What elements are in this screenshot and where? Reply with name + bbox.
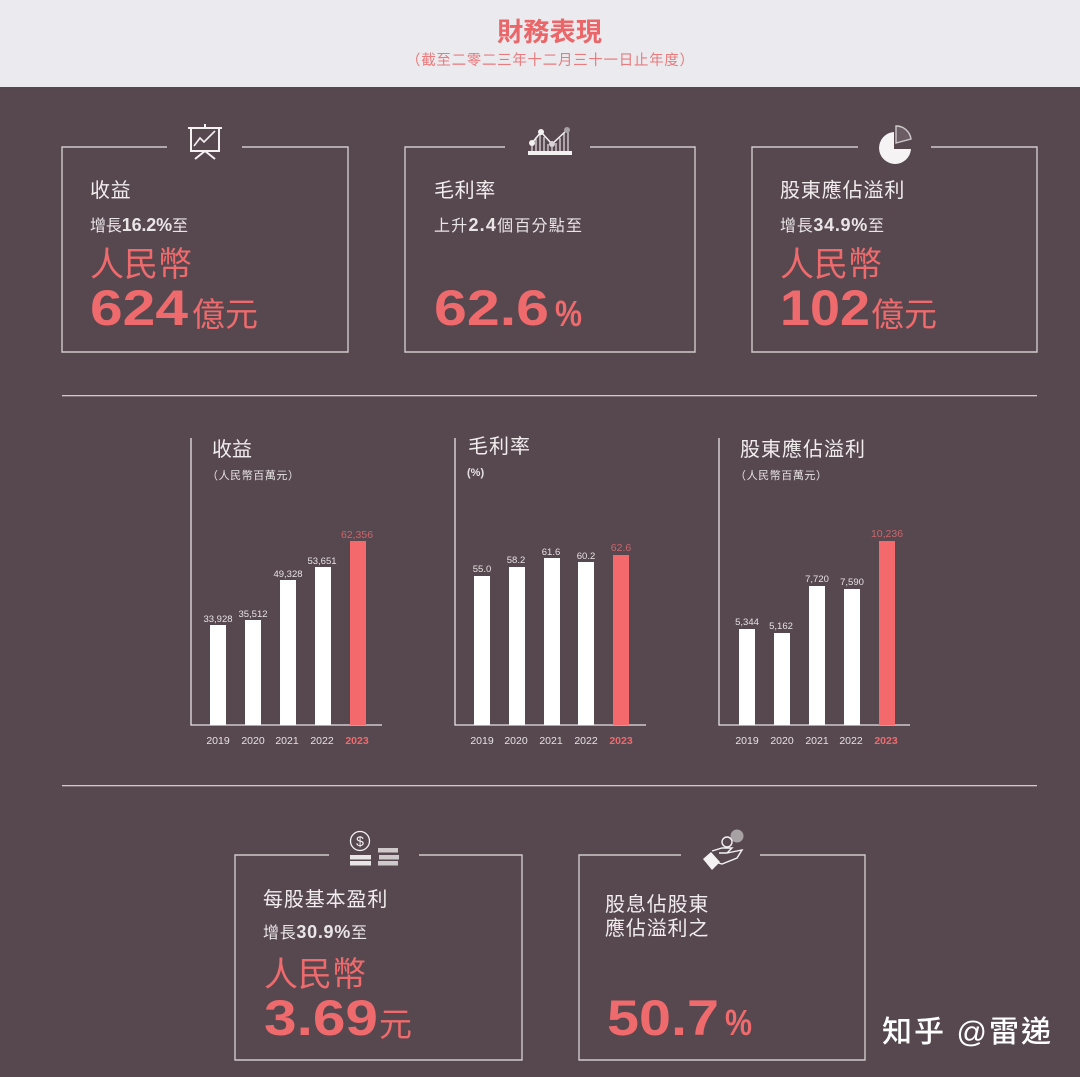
year labels: 2021 bbox=[539, 735, 563, 747]
value: 62.6 bbox=[434, 280, 549, 336]
year labels: 2023 bbox=[874, 735, 898, 747]
value labels: 5,162 bbox=[769, 621, 793, 632]
value labels: 61.6 bbox=[542, 547, 560, 558]
chart title: 收益 bbox=[212, 438, 252, 461]
bar chart: revenue bbox=[191, 438, 382, 747]
year labels: 2022 bbox=[839, 735, 863, 747]
title: 財務表現 bbox=[497, 17, 602, 47]
chart title: 毛利率 bbox=[468, 435, 530, 458]
bars bbox=[210, 541, 366, 725]
unit: % bbox=[555, 293, 582, 334]
panel: revenue bbox=[62, 124, 348, 352]
icon: dollar coin and stacks bbox=[350, 832, 399, 866]
value labels: 58.2 bbox=[507, 555, 525, 566]
year labels: 2022 bbox=[310, 735, 334, 747]
heading: 每股基本盈利 bbox=[263, 888, 388, 911]
value labels: 7,590 bbox=[840, 577, 864, 588]
year labels: 2021 bbox=[275, 735, 299, 747]
panel: profit attributable to shareholders bbox=[752, 126, 1037, 352]
icon: dollar coin and stacks: $ bbox=[356, 833, 364, 849]
currency label: 人民幣 bbox=[90, 246, 192, 284]
value: 3.69 bbox=[264, 990, 378, 1046]
year labels bbox=[470, 735, 633, 747]
icon: pie chart bbox=[879, 126, 911, 164]
panel: gross margin bbox=[405, 127, 695, 352]
growth text: 增長30.9%至 bbox=[263, 922, 367, 942]
year labels: 2023 bbox=[345, 735, 369, 747]
year labels: 2021 bbox=[805, 735, 829, 747]
value labels: 5,344 bbox=[735, 617, 759, 628]
currency label: 人民幣 bbox=[264, 956, 366, 994]
value labels: 10,236 bbox=[871, 528, 903, 540]
chart unit: （人民幣百萬元） bbox=[735, 469, 827, 482]
year labels: 2020 bbox=[770, 735, 794, 747]
value labels: 49,328 bbox=[273, 569, 303, 580]
value labels bbox=[203, 529, 373, 625]
heading: 股息佔股東 bbox=[605, 893, 709, 916]
chart unit: (%) bbox=[467, 467, 484, 479]
unit: 元 bbox=[379, 1006, 412, 1043]
bars bbox=[474, 555, 629, 725]
chart title: 股東應佔溢利 bbox=[740, 437, 865, 461]
bar chart: profit attributable bbox=[719, 437, 910, 747]
heading: 股東應佔溢利 bbox=[780, 178, 905, 202]
growth text: 上升2.4個百分點至 bbox=[434, 215, 582, 235]
panel: basic earnings per share bbox=[235, 832, 522, 1060]
value labels: 60.2 bbox=[577, 551, 595, 562]
value labels: 7,720 bbox=[805, 574, 829, 585]
value labels: 53,651 bbox=[307, 556, 337, 567]
subtitle: （截至二零二三年十二月三十一日止年度） bbox=[406, 52, 694, 69]
value labels bbox=[473, 542, 631, 575]
currency label: 人民幣 bbox=[780, 246, 882, 284]
unit: 億元 bbox=[871, 296, 937, 333]
header band bbox=[0, 0, 1080, 87]
value: 50.7 bbox=[607, 990, 719, 1046]
watermark: 知乎 @雷递 bbox=[882, 1016, 1051, 1049]
unit: % bbox=[725, 1002, 752, 1043]
value labels: 33,928 bbox=[203, 614, 233, 625]
value: 624 bbox=[90, 280, 188, 336]
growth text: 增長34.9%至 bbox=[780, 215, 884, 235]
panel: dividend payout bbox=[579, 830, 865, 1060]
value labels: 55.0 bbox=[473, 564, 491, 575]
year labels bbox=[735, 735, 898, 747]
icon: presentation board bbox=[188, 124, 222, 159]
value labels: 62,356 bbox=[341, 529, 373, 541]
year labels: 2020 bbox=[504, 735, 528, 747]
value labels: 62.6 bbox=[611, 542, 631, 554]
unit: 億元 bbox=[192, 296, 258, 333]
year labels: 2020 bbox=[241, 735, 265, 747]
icon: hand holding coin bbox=[703, 830, 744, 870]
value: 102 bbox=[780, 280, 870, 336]
icon: line chart bbox=[528, 127, 572, 155]
year labels bbox=[206, 735, 369, 747]
year labels: 2019 bbox=[735, 735, 759, 747]
heading: 毛利率 bbox=[434, 179, 496, 202]
chart unit: （人民幣百萬元） bbox=[207, 469, 299, 482]
year labels: 2019 bbox=[470, 735, 494, 747]
bar chart: gross margin bbox=[455, 435, 646, 747]
growth text: 增長16.2%至 bbox=[90, 215, 188, 235]
heading line 2: 應佔溢利之 bbox=[605, 916, 709, 940]
year labels: 2022 bbox=[574, 735, 598, 747]
year labels: 2023 bbox=[609, 735, 633, 747]
year labels: 2019 bbox=[206, 735, 230, 747]
bars bbox=[739, 541, 895, 725]
heading: 收益 bbox=[90, 179, 131, 202]
value labels bbox=[735, 528, 903, 632]
value labels: 35,512 bbox=[238, 609, 268, 620]
